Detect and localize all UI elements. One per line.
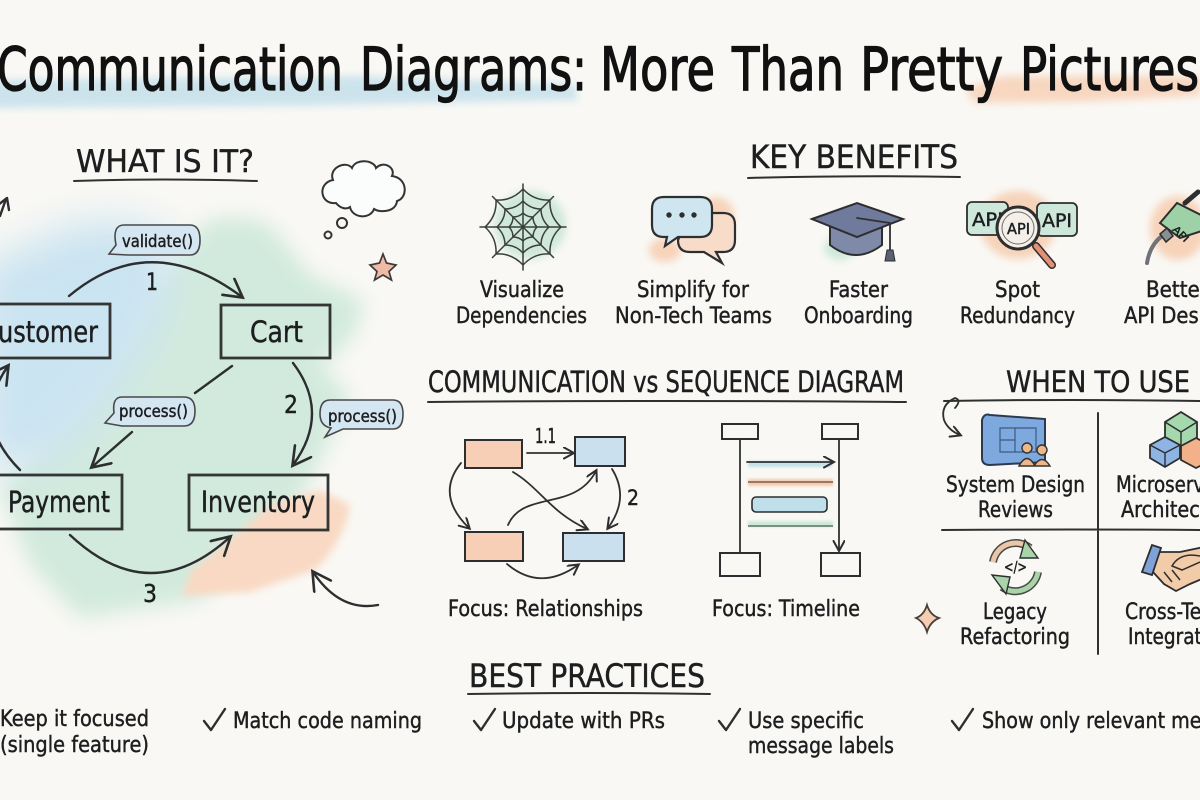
icon: handshake [1142,545,1200,591]
heading: what is it: WHAT IS IT? [76,144,254,180]
icon: curved arrow [943,398,960,435]
item: system design reviews: Reviews [978,498,1053,523]
panel: communication vs sequence [428,365,906,622]
node: customer [0,304,110,358]
icon: spider web [480,184,566,270]
speech bubble: validate: validate() [122,232,193,251]
benefit: spot redundancy [960,191,1077,329]
title: Than [731,35,844,105]
arrow: customer to cart [69,262,242,297]
icon: refresh code: </> [1004,558,1027,576]
title: Pretty [860,35,1003,105]
icon: small arrow top left [0,198,9,216]
icon: star [370,254,396,280]
diagram: sequence [720,424,860,576]
speech bubble: process right: process() [328,407,397,426]
arrow: payment to customer [0,366,20,470]
diagram: communication: 2 [627,486,639,510]
panel: what is it [0,144,405,618]
panel: key benefits [456,138,1200,329]
icon: graduation cap [812,203,903,261]
icon: plug: API [1170,224,1190,245]
benefit: simplify for non-tech teams: Non-Tech Teams [615,304,772,329]
practice: match code naming: Match code naming [233,708,422,734]
item: system design reviews [946,415,1085,523]
benefit: simplify for non-tech teams [615,197,772,329]
arrow: payment to inventory [70,535,230,573]
practice: specific message labels: message labels [748,733,894,759]
label: 3: 3 [143,579,157,608]
title: More [600,35,715,105]
benefit: simplify for non-tech teams: Simplify for [637,278,750,303]
watercolor wash: orange [182,490,350,596]
node: cart: Cart [250,315,303,349]
item: legacy refactoring: Refactoring [960,625,1070,650]
title: Diagrams: [360,35,587,105]
heading: communication vs sequence diagram: COMMUNICATION vs SEQUENCE DIAGRAM [428,365,904,399]
node: payment: Payment [8,485,110,519]
icon: blueprint [982,415,1050,466]
node: payment [0,475,122,529]
label: 1: 1 [146,268,158,296]
title wash: blue [0,76,578,108]
speech bubble: process left [105,397,195,426]
practice: specific message labels: Use specific [748,708,864,734]
item: legacy refactoring: Legacy [983,600,1047,625]
icon: sparkle [916,605,939,632]
label: focus timeline: Focus: Timeline [712,597,860,622]
benefit: visualize dependencies: Dependencies [456,304,587,329]
benefit: visualize dependencies [456,184,587,329]
practice: specific message labels [719,708,894,759]
watercolor wash: green [0,218,363,618]
benefit: faster onboarding: Faster [829,278,889,303]
diagram: communication [450,424,639,578]
benefit: faster onboarding [804,203,913,329]
item: cross-team integration [1125,545,1200,650]
title [0,35,1199,105]
icon: cubes [1150,412,1200,468]
item: legacy refactoring [960,540,1070,650]
benefit: spot redundancy: Spot [995,278,1040,303]
node: cart [221,305,330,358]
icon: speech bubbles [649,197,735,263]
icon: thought cloud [322,161,405,238]
title wash: orange [965,76,1200,103]
node: inventory [189,475,328,530]
icon: api magnifier: API [1042,210,1072,232]
arrow: cart to payment [92,366,232,467]
watercolor wash: blue [0,220,175,470]
arrow: cart to inventory [293,363,312,465]
arrow: curved pointer [313,572,378,606]
benefit: visualize dependencies: Visualize [480,278,564,303]
practice: keep it focused: Keep it focused [0,706,149,732]
heading: key benefits: KEY BENEFITS [750,138,958,176]
speech bubble: validate [109,225,200,255]
speech bubble: process right [320,400,403,437]
item: microservices architecture [1116,412,1200,523]
icon: api magnifier [967,191,1077,265]
benefit: better api design [1124,192,1200,329]
practice: keep it focused [0,706,149,758]
heading: best practices: BEST PRACTICES [469,657,705,695]
icon: api magnifier: API [972,209,1003,231]
benefit: faster onboarding: Onboarding [804,304,913,329]
node: inventory: Inventory [201,485,315,519]
practice: keep it focused: (single feature) [0,732,149,758]
panel: best practices [0,657,1200,759]
benefit: spot redundancy: Redundancy [960,304,1075,329]
item: system design reviews: System Design [946,473,1085,498]
practice: update with prs: Update with PRs [502,708,665,734]
title: Communication [0,35,343,105]
label: focus relationships: Focus: Relationships [448,597,643,622]
panel: when to use [916,365,1200,654]
diagram: communication: 1.1 [535,424,556,448]
speech bubble: process left: process() [119,402,188,421]
node: customer: ustomer [0,315,98,349]
icon: api magnifier: API [1007,220,1030,238]
label: 2: 2 [284,390,298,419]
